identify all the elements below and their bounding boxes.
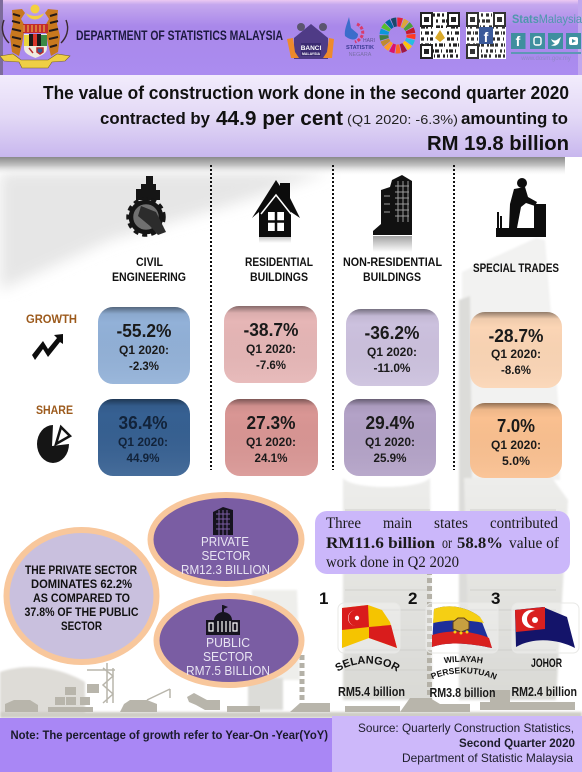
column label: residential buildings [245, 255, 313, 284]
footer note [0, 718, 332, 772]
bubble: public sector [156, 596, 302, 685]
state: Wilayah Persekutuan [408, 589, 498, 700]
icon: Selangor flag [342, 605, 397, 648]
column dividers [211, 165, 454, 470]
icon: Hari Statistik Negara logo: STATISTIK [346, 45, 374, 51]
headline line 2: contracted by [100, 109, 211, 128]
headline line 2 [100, 108, 568, 130]
footer source [332, 716, 582, 772]
bubble: private sector [150, 495, 302, 584]
callout: three main states: main [383, 515, 412, 532]
bubble: private sector: SECTOR [202, 548, 250, 563]
headline line 2: (Q1 2020: -6.3%) [347, 112, 458, 127]
rank number 2: 2 [408, 589, 417, 608]
callout: three main states: states [434, 515, 468, 532]
value: Selangor: RM5.4 billion [338, 684, 405, 699]
headline line 2: 44.9 per cent [216, 108, 343, 130]
column label: civil engineering: ENGINEERING [112, 270, 186, 284]
icon: Hari Statistik Negara logo: HARI [363, 38, 375, 44]
share card: civil engineering: 44.9% [126, 451, 160, 465]
growth card: non-residential buildings: -11.0% [374, 361, 411, 375]
icon: QR code website [420, 12, 460, 59]
headline line 3: RM 19.8 billion [427, 133, 569, 155]
footer source: Second Quarter 2020 [459, 736, 575, 750]
column label: civil engineering [112, 255, 186, 284]
icon: Hari Statistik Negara logo [345, 17, 375, 58]
growth card: civil engineering: -2.3% [129, 359, 159, 373]
share card: residential buildings: 24.1% [254, 451, 288, 465]
growth card: residential buildings: -7.6% [256, 358, 286, 372]
callout: private sector dominance: SECTOR [61, 619, 102, 633]
growth card: civil engineering: Q1 2020: [119, 343, 169, 357]
icon: Banci census logo: BANCI [301, 45, 321, 52]
icon: special trades worker [496, 178, 546, 237]
rank number 1: 1 [319, 589, 328, 608]
column label: non-residential buildings [343, 255, 442, 284]
callout: private sector dominance: DOMINATES 62.2% [31, 577, 132, 591]
icon: non-residential buildings [373, 175, 412, 252]
column label: non-residential buildings: BUILDINGS [363, 270, 421, 284]
icon: Johor flag [515, 607, 575, 648]
growth card: non-residential buildings: -36.2% [364, 323, 420, 343]
growth card: special trades: -8.6% [501, 363, 531, 377]
share card: residential buildings: 27.3% [246, 413, 296, 433]
icon: residential house [252, 180, 300, 243]
share card: civil engineering: Q1 2020: [118, 435, 168, 449]
icon: Malaysian coat of arms [0, 4, 70, 68]
share card: non-residential buildings: 25.9% [374, 451, 407, 465]
value: Wilayah Persekutuan: RM3.8 billion [430, 685, 496, 700]
growth card: residential buildings: Q1 2020: [246, 342, 296, 356]
state name: Wilayah Persekutuan [430, 656, 497, 680]
state name: Wilayah Persekutuan: PERSEKUTUAN [430, 667, 497, 680]
rank number 3: 3 [491, 589, 500, 608]
logo: StatsMalaysia social block [511, 12, 582, 62]
icon: QR code Facebook: f [484, 29, 489, 45]
icon: Banci census logo: MALAYSIA [302, 52, 320, 56]
column label: civil engineering: CIVIL [136, 255, 163, 269]
callout: private sector dominance: AS COMPARED TO [33, 591, 130, 605]
icon: public government building [206, 605, 240, 635]
headline line 2: amounting to [461, 109, 568, 128]
logo: StatsMalaysia social block: www.dosm.gov.my [520, 56, 571, 62]
growth card: residential buildings: -38.7% [244, 320, 298, 340]
icon: growth arrow [32, 334, 63, 360]
growth card: special trades [470, 312, 562, 388]
callout: three main states [315, 511, 570, 574]
icon: Banci census logo [287, 23, 334, 59]
callout: three main states: value of [509, 535, 560, 552]
share card: non-residential buildings [344, 399, 436, 476]
callout: private sector dominance [6, 530, 156, 662]
share card: non-residential buildings: Q1 2020: [365, 435, 415, 449]
footer note: Note: The percentage of growth refer to Year-On -Year(YoY) [10, 728, 328, 742]
growth card: non-residential buildings: Q1 2020: [367, 345, 417, 359]
column label: residential buildings: RESIDENTIAL [245, 255, 313, 269]
share card: civil engineering [98, 399, 190, 476]
share card: residential buildings: Q1 2020: [246, 435, 296, 449]
callout: private sector dominance: THE PRIVATE SECTOR [25, 563, 137, 577]
share card: special trades: Q1 2020: [491, 438, 541, 452]
bubble: private sector: PRIVATE [201, 534, 249, 549]
state name: Johor: JOHOR [531, 658, 563, 670]
headline line 1: The value of construction work done in the second quarter 2020 [43, 83, 569, 103]
callout: private sector dominance: 37.8% OF THE PUBLIC [24, 605, 139, 619]
column label: special trades: SPECIAL TRADES [473, 261, 559, 275]
growth card: civil engineering [98, 307, 190, 384]
bubble: public sector: PUBLIC [206, 635, 250, 650]
growth card: civil engineering: -55.2% [116, 321, 172, 341]
callout: three main states: Three [326, 515, 361, 532]
heading: department name: DEPARTMENT OF STATISTICS MALAYSIA [76, 27, 283, 43]
bubble: public sector: SECTOR [203, 649, 253, 664]
state name: Wilayah Persekutuan: WILAYAH [444, 656, 483, 664]
state: Selangor [319, 589, 405, 699]
share card: special trades: 5.0% [502, 454, 530, 468]
icon: Wilayah Persekutuan flag [432, 606, 492, 648]
icon: share pie chart [37, 425, 70, 463]
icon: civil engineering [128, 176, 166, 235]
callout: three main states: 58.8% [457, 535, 503, 552]
state name: Selangor: SELANGOR [335, 656, 400, 672]
row label: share: SHARE [36, 403, 73, 417]
callout: three main states: RM11.6 billion [326, 535, 435, 552]
footer source: Source: Quarterly Construction Statistics, [358, 721, 574, 735]
growth card: non-residential buildings [346, 309, 439, 386]
bubble: private sector: RM12.3 BILLION [181, 562, 270, 577]
bubble: public sector: RM7.5 BILLION [186, 663, 270, 678]
column label: non-residential buildings: NON-RESIDENTIAL [343, 255, 442, 269]
banner: headline [0, 75, 582, 176]
row label: growth: GROWTH [26, 312, 77, 326]
callout: three main states: work done in Q2 2020 [326, 554, 459, 571]
share card: residential buildings [225, 399, 318, 476]
share card: non-residential buildings: 29.4% [366, 413, 414, 433]
icon: Hari Statistik Negara logo: NEGARA [349, 52, 372, 58]
logo: StatsMalaysia social block: f [516, 33, 521, 49]
column label: residential buildings: BUILDINGS [250, 270, 308, 284]
icon: QR code Facebook [466, 12, 506, 59]
growth card: residential buildings [224, 306, 317, 383]
share card: special trades: 7.0% [497, 416, 535, 436]
state: Johor [491, 589, 579, 699]
share card: civil engineering: 36.4% [118, 413, 168, 433]
callout: three main states: contributed [490, 515, 558, 532]
growth card: special trades: Q1 2020: [491, 347, 541, 361]
growth card: special trades: -28.7% [488, 326, 544, 346]
callout: three main states: or [442, 535, 453, 552]
share card: special trades [470, 403, 562, 478]
icon: SDG wheel [384, 22, 411, 49]
icon: private office building [213, 507, 233, 535]
header band [0, 0, 582, 75]
footer source: Department of Statistic Malaysia [402, 751, 573, 765]
